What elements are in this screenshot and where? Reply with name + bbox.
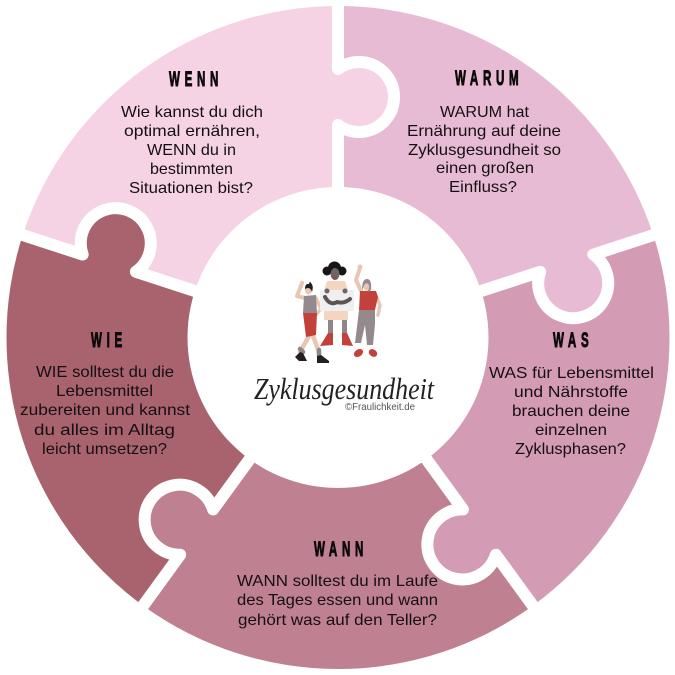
text: WARUM question: einen großen (436, 160, 534, 177)
text: WENN question: Wie kannst du dich (121, 104, 263, 121)
text: WENN question (121, 104, 263, 197)
credit: Fraulichkeit.de: ©Fraulichkeit.de (345, 402, 415, 413)
text: WAS question: brauchen deine (512, 403, 630, 420)
heading: WIE: WIE (91, 328, 127, 352)
text: WIE question: WIE solltest du die (36, 364, 174, 381)
heading: WARUM: WARUM (455, 66, 523, 90)
text: WENN question: bestimmten (150, 161, 233, 178)
text: WIE question (20, 364, 191, 458)
panel: WAS (338, 235, 670, 606)
text: WARUM question (407, 104, 561, 196)
panel: WARUM (338, 6, 653, 338)
text: WANN question: des Tages essen und wann (237, 592, 438, 609)
figure: right woman (352, 264, 380, 359)
text: WAS question: Zyklusphasen? (515, 441, 626, 458)
text: WARUM question: Zyklusgesundheit so (408, 142, 561, 159)
text: WIE question: Lebensmittel (56, 383, 153, 400)
center circle (188, 187, 488, 488)
text: WAS question: und Nährstoffe (514, 384, 628, 401)
logo title: Zyklusgesundheit: Zyklusgesundheit (254, 371, 435, 406)
text: WIE question: zubereiten und kannst (20, 402, 191, 419)
panel: WANN (143, 338, 533, 669)
figure: center woman (320, 262, 354, 346)
text: WAS question: einzelnen (535, 422, 607, 439)
text: WANN question (237, 573, 438, 629)
text: WANN question: WANN solltest du im Laufe (237, 573, 438, 590)
text: WARUM question: Ernährung auf deine (407, 123, 561, 140)
text: WARUM question: WARUM hat (440, 104, 530, 121)
panel: WIE (6, 208, 338, 606)
heading: WENN: WENN (169, 67, 223, 91)
figure: left woman (295, 282, 329, 363)
text: WAS question: WAS für Lebensmittel (489, 365, 654, 382)
illustration: three women (295, 262, 380, 363)
text: WARUM question: Einfluss? (449, 179, 517, 196)
text: WENN question: WENN du in (147, 142, 236, 159)
text: WAS question (489, 365, 654, 458)
text: WENN question: Situationen bist? (129, 180, 253, 197)
text: WENN question: optimal ernähren, (124, 123, 260, 140)
panel: WENN (23, 6, 394, 338)
text: WIE question: leicht umsetzen? (42, 441, 167, 458)
text: WANN question: gehört was auf den Teller? (238, 612, 437, 629)
heading: WANN: WANN (314, 537, 368, 561)
heading: WAS: WAS (553, 328, 593, 352)
text: WIE question: du alles im Alltag (34, 422, 175, 439)
